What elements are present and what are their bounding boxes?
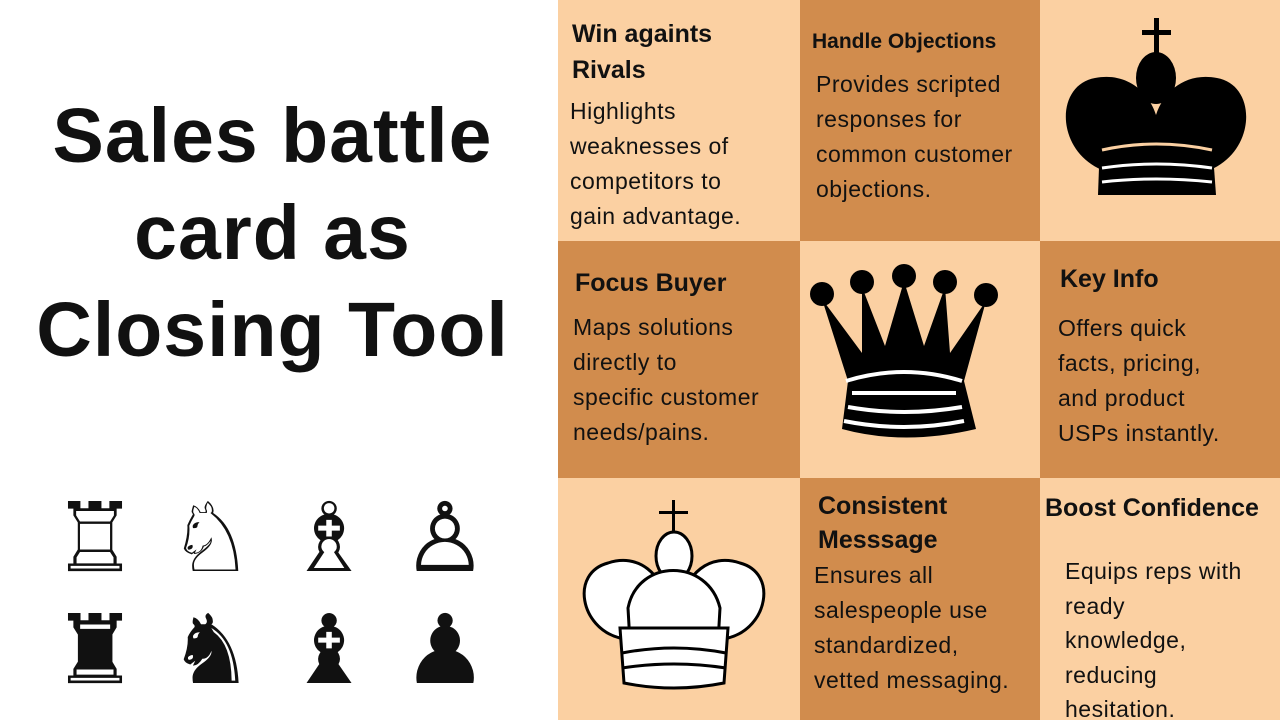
panel: focus buyer: Maps solutions: [573, 314, 733, 340]
panel: key info: Offers quick: [1058, 315, 1186, 341]
panel: key info: Key Info: [1060, 265, 1159, 293]
title: [36, 93, 509, 373]
panel: win against rivals: gain advantage.: [570, 203, 741, 229]
panel: key info: USPs instantly.: [1058, 420, 1220, 446]
panel: handle objections: objections.: [816, 176, 931, 202]
panel: handle objections: responses for: [816, 106, 962, 132]
panel: key info: facts, pricing,: [1058, 350, 1201, 376]
panel: handle objections: Provides scripted: [816, 71, 1001, 97]
panel: key info: and product: [1058, 385, 1185, 411]
panel: boost confidence: Boost Confidence: [1045, 494, 1259, 522]
panel: win against rivals: competitors to: [570, 168, 721, 194]
panel: handle objections: Handle Objections: [812, 30, 996, 53]
panel: boost confidence: ready: [1065, 592, 1125, 618]
panel: consistent message: Consistent: [818, 492, 947, 520]
panel: handle objections: [800, 0, 1040, 241]
title: Sales battle: [52, 93, 492, 179]
panel: focus buyer: [558, 241, 800, 478]
icons: white chess pieces: [52, 482, 488, 594]
icons: black chess pieces: ♝: [286, 594, 372, 706]
panel: consistent message: vetted messaging.: [814, 667, 1009, 693]
icons: black chess pieces: [52, 594, 488, 706]
panel: consistent message: [800, 478, 1040, 720]
icon: black queen: [810, 264, 998, 438]
icons: black chess pieces: ♜: [52, 594, 138, 706]
icons: white chess pieces: ♘: [168, 482, 254, 594]
panel: key info: [1040, 241, 1280, 478]
panel: white king: [558, 478, 800, 720]
icons: white chess pieces: ♗: [286, 482, 372, 594]
panel: focus buyer: directly to: [573, 349, 677, 375]
panel: win against rivals: Win againts: [572, 20, 712, 48]
panel: consistent message: Ensures all: [814, 562, 933, 588]
icon: white king: [582, 500, 766, 690]
icons: black chess pieces: ♞: [168, 594, 254, 706]
panel: boost confidence: knowledge,: [1065, 627, 1186, 653]
panel: win against rivals: Rivals: [572, 56, 646, 84]
panel: consistent message: Messsage: [818, 526, 938, 554]
title: Closing Tool: [36, 287, 509, 373]
panel: consistent message: standardized,: [814, 632, 959, 658]
panel: win against rivals: [558, 0, 800, 241]
title: card as: [134, 190, 411, 276]
panel: boost confidence: reducing: [1065, 662, 1157, 688]
panel: win against rivals: Highlights: [570, 98, 676, 124]
panel: handle objections: common customer: [816, 141, 1013, 167]
panel: focus buyer: Focus Buyer: [575, 269, 726, 297]
panel: boost confidence: [1040, 478, 1280, 720]
panel: black king: [1040, 0, 1280, 241]
icon: black king: [1066, 18, 1246, 195]
icons: black chess pieces: ♟: [402, 594, 488, 706]
panel: consistent message: salespeople use: [814, 597, 988, 623]
panel: focus buyer: needs/pains.: [573, 419, 709, 445]
panel: focus buyer: specific customer: [573, 384, 759, 410]
panel: queen: [800, 241, 1040, 478]
panel: win against rivals: weaknesses of: [570, 133, 729, 159]
panel: boost confidence: Equips reps with: [1065, 558, 1242, 584]
icons: white chess pieces: ♙: [402, 482, 488, 594]
icons: white chess pieces: ♖: [52, 482, 138, 594]
